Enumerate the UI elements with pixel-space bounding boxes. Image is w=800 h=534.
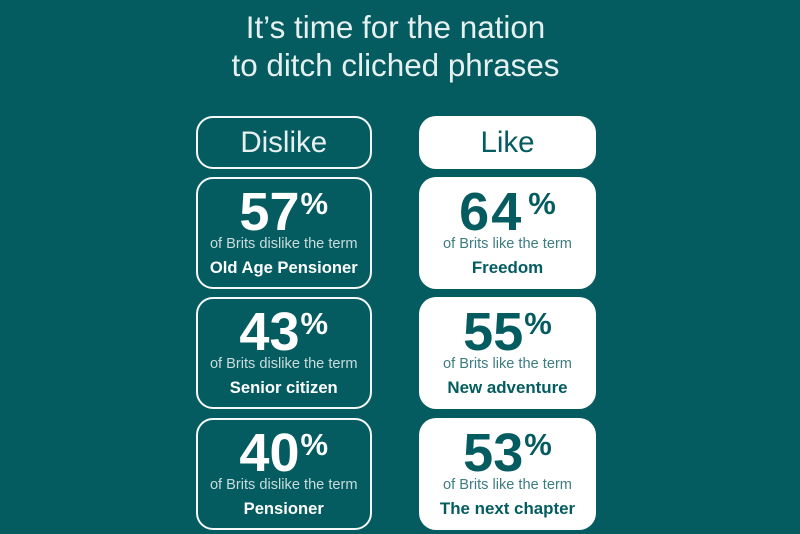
- statistic: 64%: 64%: [459, 182, 556, 242]
- card: dislike Senior citizen 43%: [196, 297, 372, 409]
- description: of Brits like the term: [443, 356, 572, 372]
- card: like The next chapter 53%: [419, 418, 596, 530]
- statistic: 40%: 40%: [239, 423, 328, 483]
- title: to ditch cliched phrases: [231, 48, 560, 83]
- description: of Brits like the term: [443, 477, 572, 493]
- column heading: Like: [419, 116, 596, 169]
- column heading: Dislike: [196, 116, 372, 169]
- card: dislike Old Age Pensioner 57%: [196, 177, 372, 289]
- title: It’s time for the nation: [246, 10, 545, 45]
- card: like Freedom 64%: [419, 177, 596, 289]
- statistic: 53%: 53%: [463, 423, 552, 483]
- column heading: Like: Like: [480, 126, 535, 159]
- card: dislike Pensioner 40%: [196, 418, 372, 530]
- term: Senior citizen: Senior citizen: [230, 378, 338, 397]
- statistic: 55%: 55%: [463, 302, 552, 362]
- title: [231, 10, 560, 83]
- term: New adventure: New adventure: [447, 378, 568, 397]
- description: of Brits dislike the term: [210, 236, 358, 252]
- description: of Brits dislike the term: [210, 477, 358, 493]
- card: like New adventure 55%: [419, 297, 596, 409]
- column heading: Dislike: Dislike: [240, 126, 327, 159]
- term: Freedom: Freedom: [472, 258, 543, 277]
- description: of Brits dislike the term: [210, 356, 358, 372]
- term: Pensioner: Pensioner: [244, 499, 324, 518]
- term: The next chapter: The next chapter: [440, 499, 575, 518]
- description: of Brits like the term: [443, 236, 572, 252]
- statistic: 43%: 43%: [239, 302, 328, 362]
- statistic: 57%: 57%: [239, 182, 328, 242]
- term: Old Age Pensioner: Old Age Pensioner: [210, 258, 358, 277]
